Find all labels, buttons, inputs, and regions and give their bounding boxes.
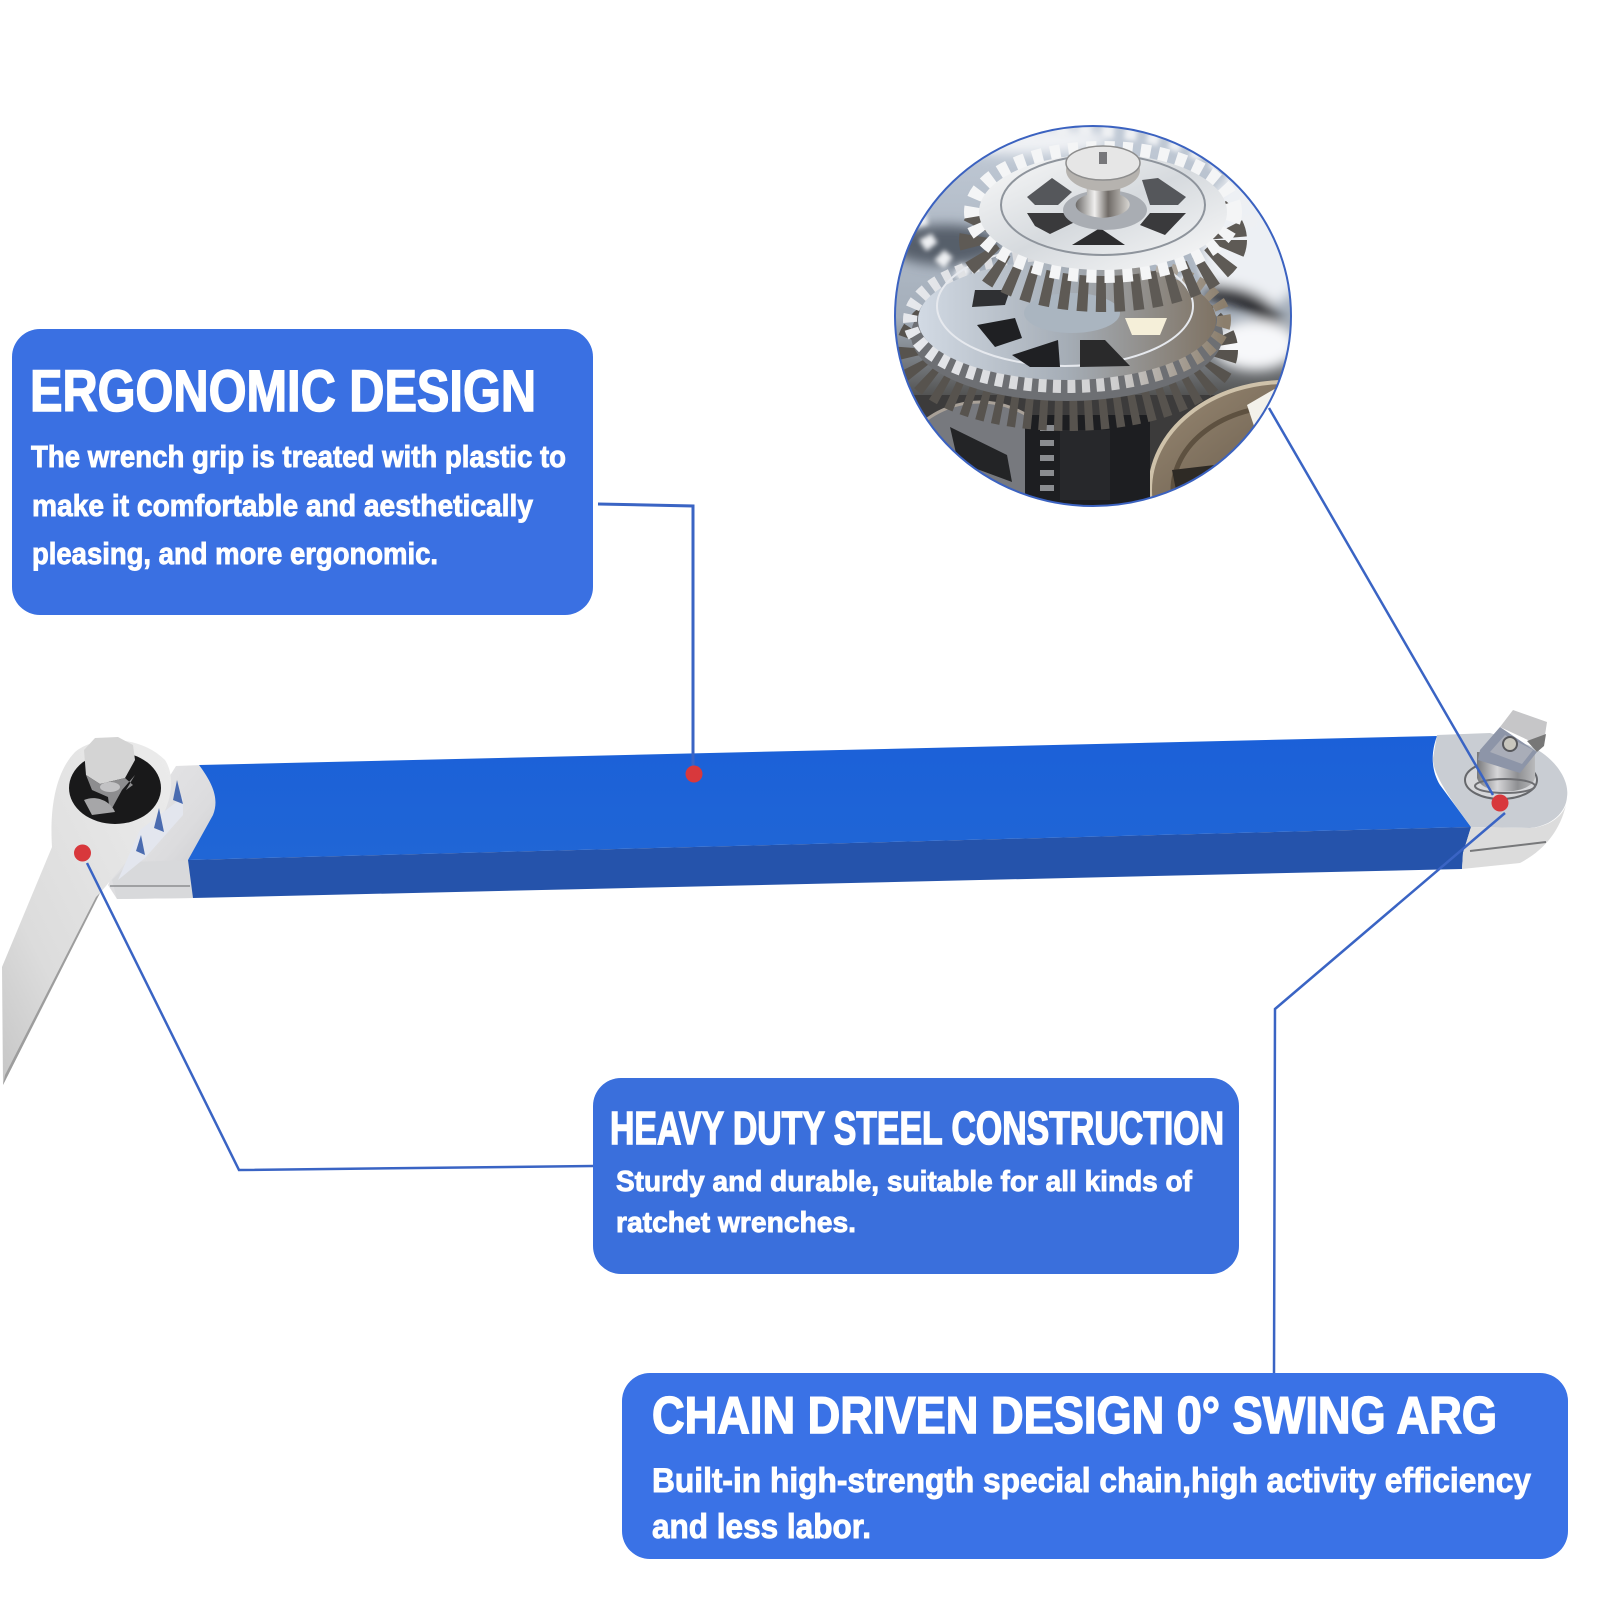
- marker dot: right head: [1492, 794, 1508, 812]
- connector: gear circle to right socket: [1269, 408, 1493, 795]
- connector: steel box to left head: [87, 863, 593, 1170]
- body text: heavy duty steel construction: [616, 1166, 1192, 1239]
- body text: ergonomic design: pleasing, and more ergonomic.: [32, 536, 438, 571]
- heading: heavy duty steel construction: HEAVY DUTY STEEL CONSTRUCTION: [610, 1102, 1224, 1154]
- body text: chain driven design: Built-in high-strength special chain,high activity efficiency: [652, 1462, 1531, 1500]
- body text: heavy duty steel construction: ratchet wrenches.: [616, 1207, 856, 1239]
- heading: ergonomic design: ERGONOMIC DESIGN: [30, 359, 536, 424]
- body text: ergonomic design: The wrench grip is treated with plastic to: [31, 439, 566, 474]
- left socket: [69, 737, 161, 824]
- lower right bronze gear: [1150, 380, 1278, 497]
- lower left gear: [927, 400, 1025, 494]
- gear background: [896, 127, 1290, 471]
- wrench extension tool: [2, 710, 1567, 1085]
- body text: ergonomic design: make it comfortable and aesthetically: [32, 488, 534, 523]
- body text: ergonomic design: [31, 439, 566, 571]
- connector: chain box to right head: [1274, 813, 1505, 1374]
- marker dot: left head: [74, 844, 91, 862]
- panel: chain driven design: [622, 1373, 1568, 1559]
- blue bar: [188, 736, 1471, 898]
- connector: ergonomic box to bar: [598, 504, 693, 775]
- left silver bracket: [108, 765, 217, 899]
- left ratchet handle: [2, 740, 183, 1085]
- gear detail circle: [894, 125, 1292, 507]
- heading: chain driven design: CHAIN DRIVEN DESIGN 0° SWING ARG: [652, 1387, 1497, 1445]
- body text: chain driven design: and less labor.: [652, 1508, 871, 1546]
- top gear: [973, 146, 1233, 294]
- body text: chain driven design: [652, 1462, 1531, 1546]
- right square drive: [1475, 710, 1547, 793]
- marker dot: bar: [686, 766, 702, 782]
- lower gear: [910, 246, 1224, 412]
- panel: ergonomic design: [12, 329, 593, 615]
- body text: heavy duty steel construction: Sturdy and durable, suitable for all kinds of: [616, 1166, 1192, 1198]
- panel: heavy duty steel construction: [593, 1078, 1239, 1274]
- central dark lower gear shaft: [1025, 415, 1150, 515]
- right silver head: [1433, 733, 1567, 869]
